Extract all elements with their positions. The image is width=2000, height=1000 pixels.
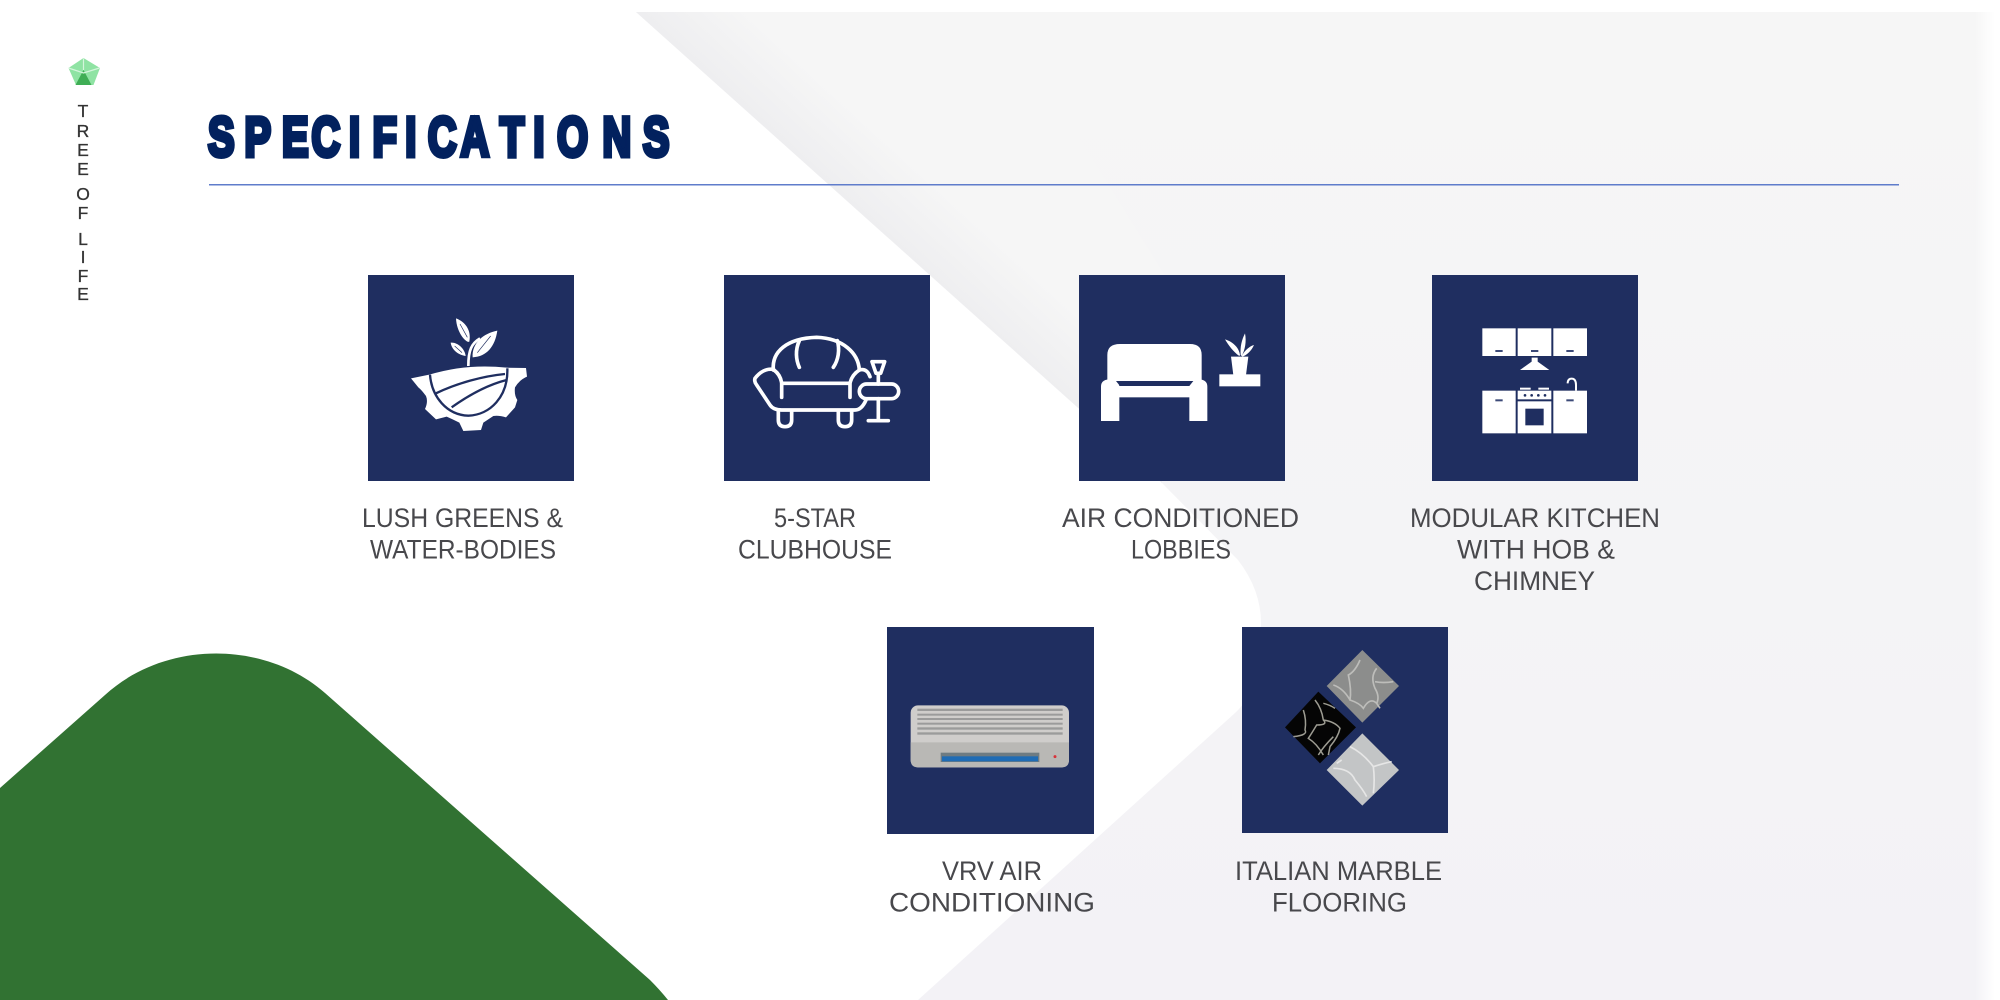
label: MODULAR KITCHEN (1410, 503, 1660, 533)
label: AIR CONDITIONED (1062, 503, 1299, 533)
card: italian marble (1235, 627, 1448, 918)
label: CONDITIONING (889, 888, 1095, 918)
card: modular kitchen (1410, 275, 1660, 596)
card: VRV air conditioning (887, 627, 1095, 918)
tile (1432, 275, 1638, 481)
label: FLOORING (1272, 888, 1407, 918)
label (889, 856, 1095, 918)
label: VRV AIR (942, 856, 1042, 886)
green rounded triangle (0, 653, 668, 1000)
icon: marble tiles (1285, 650, 1399, 806)
label: 5-STAR (774, 503, 856, 533)
card: clubhouse (724, 275, 930, 564)
logo: tree of life (68, 58, 100, 85)
label: CLUBHOUSE (738, 534, 892, 564)
icon: split AC unit (911, 705, 1069, 767)
tile (887, 627, 1094, 834)
label: WITH HOB & (1457, 534, 1615, 564)
title rule (209, 184, 1899, 186)
card: lush greens (362, 275, 574, 564)
label (1062, 503, 1299, 564)
tile (368, 275, 574, 481)
label: WATER-BODIES (370, 534, 556, 564)
label: ITALIAN MARBLE (1235, 856, 1442, 886)
icon: sofa and plant (1101, 333, 1260, 421)
icon: plant in gear (411, 318, 527, 431)
label: CHIMNEY (1474, 566, 1595, 596)
title: SPECIFICATIONS (208, 106, 669, 169)
label (362, 503, 563, 564)
tile (724, 275, 930, 481)
label (738, 503, 892, 564)
card: air conditioned lobbies (1062, 275, 1299, 564)
vertical brand text: TREE OF LIFE (76, 101, 90, 304)
icon: kitchen (1482, 328, 1587, 433)
icon: armchair and table (755, 337, 899, 427)
label: LUSH GREENS & (362, 503, 563, 533)
tile (1079, 275, 1285, 481)
label: LOBBIES (1131, 534, 1231, 564)
label (1410, 503, 1660, 596)
background light grey panel (636, 12, 1995, 1000)
tile (1242, 627, 1448, 833)
label (1235, 856, 1442, 918)
